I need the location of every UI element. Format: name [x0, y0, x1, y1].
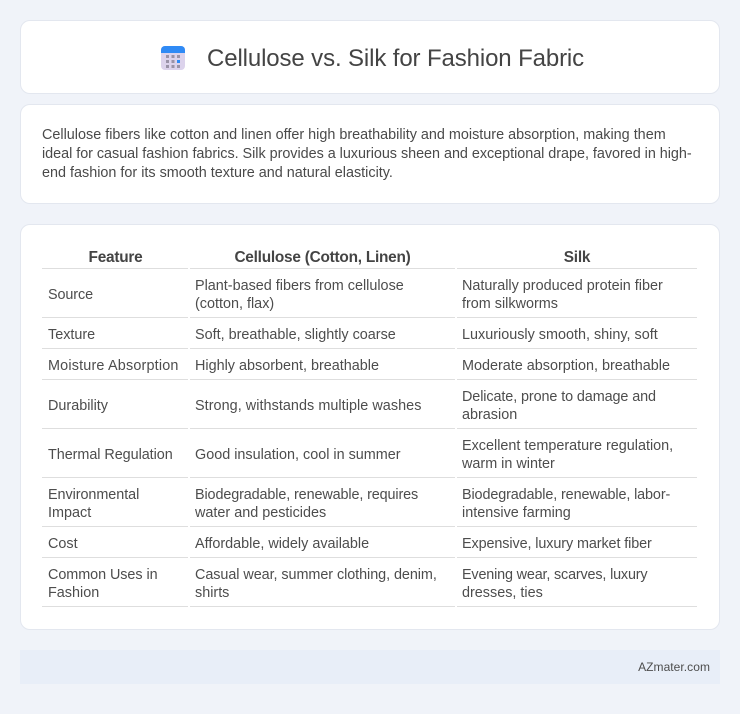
row: durability: Durability — [48, 398, 108, 414]
row: environmental impact: water and pesticides — [195, 505, 326, 521]
row: environmental impact: Environmental — [48, 487, 139, 503]
summary text: end fashion for its smooth texture and natural elasticity. — [42, 165, 393, 181]
summary text — [42, 127, 692, 181]
row: environmental impact: Biodegradable, renewable, requires — [195, 487, 418, 503]
row: source — [48, 278, 663, 312]
row: common uses in fashion: Common Uses in — [48, 567, 158, 583]
table header: feature: Feature — [89, 249, 142, 266]
title: Cellulose vs. Silk for Fashion Fabric — [207, 45, 584, 72]
row: environmental impact: intensive farming — [462, 505, 571, 521]
row: common uses in fashion: Evening wear, scarves, luxury — [462, 567, 647, 583]
table header: cellulose: Cellulose (Cotton, Linen) — [234, 249, 411, 266]
row: thermal regulation: Thermal Regulation — [48, 447, 173, 463]
row: cost: Expensive, luxury market fiber — [462, 536, 652, 552]
row: environmental impact — [48, 487, 670, 521]
row: common uses in fashion: shirts — [195, 585, 229, 601]
row: source: from silkworms — [462, 296, 558, 312]
row: thermal regulation: warm in winter — [462, 456, 555, 472]
row: source: Naturally produced protein fiber — [462, 278, 663, 294]
row: cost: Cost — [48, 536, 78, 552]
row: moisture absorption — [48, 358, 670, 374]
row: thermal regulation: Good insulation, cool in summer — [195, 447, 401, 463]
row: texture — [48, 327, 658, 343]
row: thermal regulation — [48, 438, 673, 472]
row: environmental impact: Biodegradable, renewable, labor- — [462, 487, 670, 503]
row: common uses in fashion: Casual wear, summer clothing, denim, — [195, 567, 437, 583]
row: common uses in fashion: dresses, ties — [462, 585, 543, 601]
footer bar — [20, 650, 720, 684]
footer credit: AZmater.com — [638, 660, 710, 674]
row: texture: Luxuriously smooth, shiny, soft — [462, 327, 658, 343]
row: texture: Soft, breathable, slightly coarse — [195, 327, 396, 343]
icon: calendar — [161, 46, 185, 70]
row: durability: Strong, withstands multiple washes — [195, 398, 421, 414]
row: environmental impact: Impact — [48, 505, 91, 521]
row: moisture absorption: Highly absorbent, breathable — [195, 358, 379, 374]
row: thermal regulation: Excellent temperature regulation, — [462, 438, 673, 454]
summary text: Cellulose fibers like cotton and linen offer high breathability and moisture absorption, making them — [42, 127, 666, 143]
row: durability — [48, 389, 656, 423]
panel: title card — [20, 20, 720, 94]
row: durability: Delicate, prone to damage and — [462, 389, 656, 405]
row: moisture absorption: Moisture Absorption — [48, 358, 179, 374]
row: durability: abrasion — [462, 407, 517, 423]
row: cost — [48, 536, 652, 552]
row: source: (cotton, flax) — [195, 296, 274, 312]
row: common uses in fashion — [48, 567, 648, 601]
row: source: Source — [48, 287, 93, 303]
row: texture: Texture — [48, 327, 95, 343]
comparison table — [42, 249, 697, 607]
table header: silk: Silk — [564, 249, 590, 266]
summary text: ideal for casual fashion fabrics. Silk provides a luxurious sheen and exceptional drape, favored in high- — [42, 146, 692, 162]
row: common uses in fashion: Fashion — [48, 585, 99, 601]
row: cost: Affordable, widely available — [195, 536, 369, 552]
row: source: Plant-based fibers from cellulose — [195, 278, 404, 294]
panel: comparison table card — [20, 224, 720, 630]
panel: summary card — [20, 104, 720, 204]
row: moisture absorption: Moderate absorption, breathable — [462, 358, 670, 374]
